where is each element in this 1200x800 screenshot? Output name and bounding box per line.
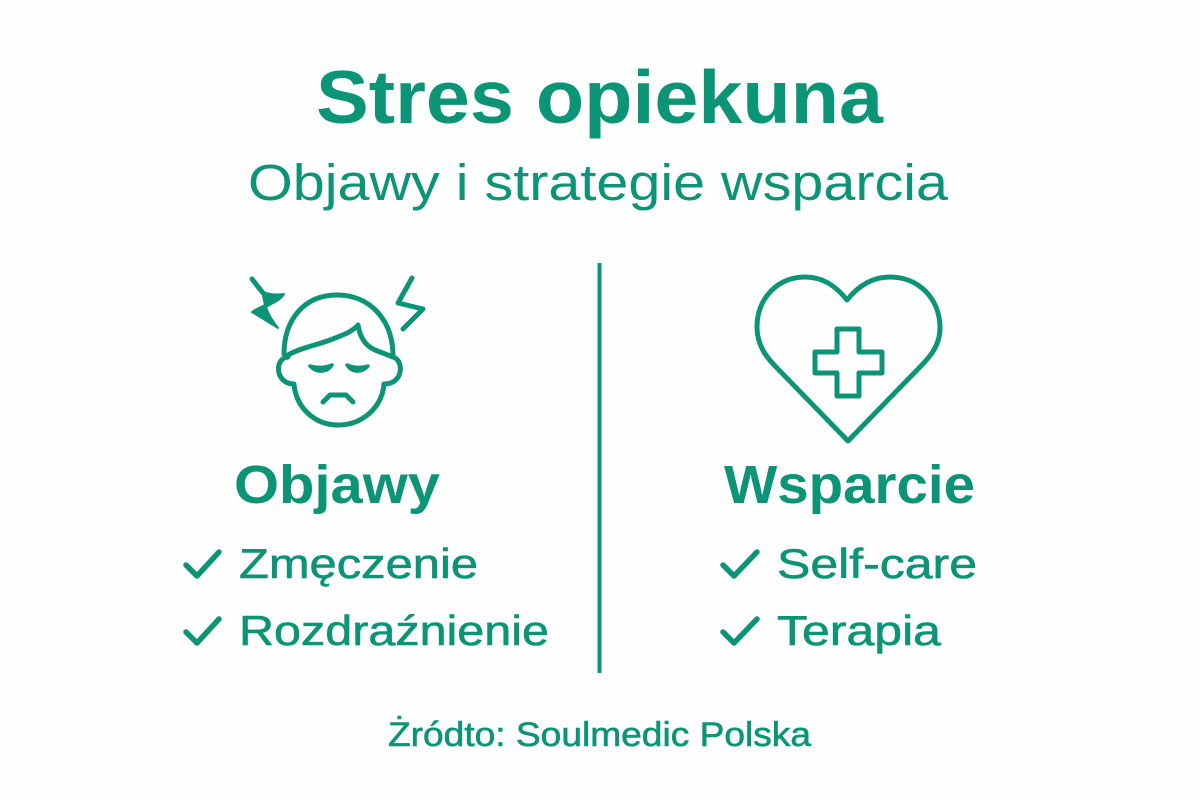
list item: Self-care xyxy=(723,540,977,587)
list item: Rozdraźnienie: Rozdraźnienie xyxy=(239,607,549,654)
subtitle: Objawy i strategie wsparcia xyxy=(248,154,949,211)
icon: stressed face with lightning bolts xyxy=(252,278,423,425)
panel: symptoms xyxy=(186,278,549,654)
source note: Żródto: Soulmedic Polska xyxy=(388,716,811,754)
title: Stres opiekuna xyxy=(316,55,884,139)
list item: Self-care: Self-care xyxy=(777,540,977,587)
list item: Terapia: Terapia xyxy=(777,607,942,654)
heading: Objawy: Objawy xyxy=(234,455,440,515)
icon: heart with medical cross xyxy=(757,277,940,441)
panel: support xyxy=(723,277,977,654)
center divider xyxy=(598,263,602,673)
list item: Terapia xyxy=(723,607,942,654)
heading: Wsparcie: Wsparcie xyxy=(724,455,975,515)
list item: Zmęczenie: Zmęczenie xyxy=(239,540,478,587)
